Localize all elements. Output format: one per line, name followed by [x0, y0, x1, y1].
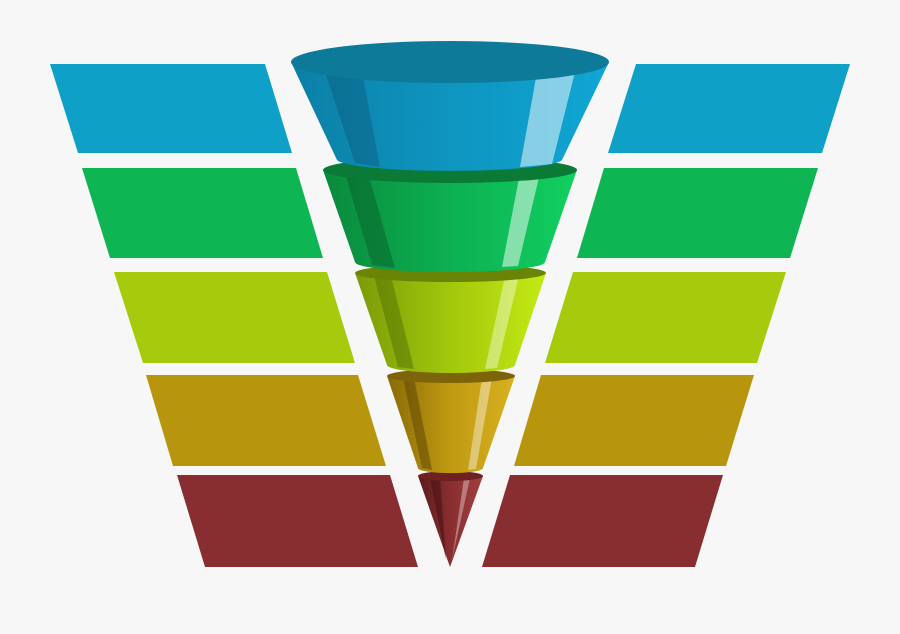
right bars — [482, 64, 850, 567]
funnel segment 1 — [291, 41, 609, 171]
funnel segment 4 — [387, 369, 515, 473]
funnel segment 5 — [418, 471, 483, 567]
funnel — [291, 41, 609, 567]
funnel segment 2 — [323, 157, 577, 272]
funnel segment 3 — [355, 264, 546, 373]
left bars — [50, 64, 418, 567]
